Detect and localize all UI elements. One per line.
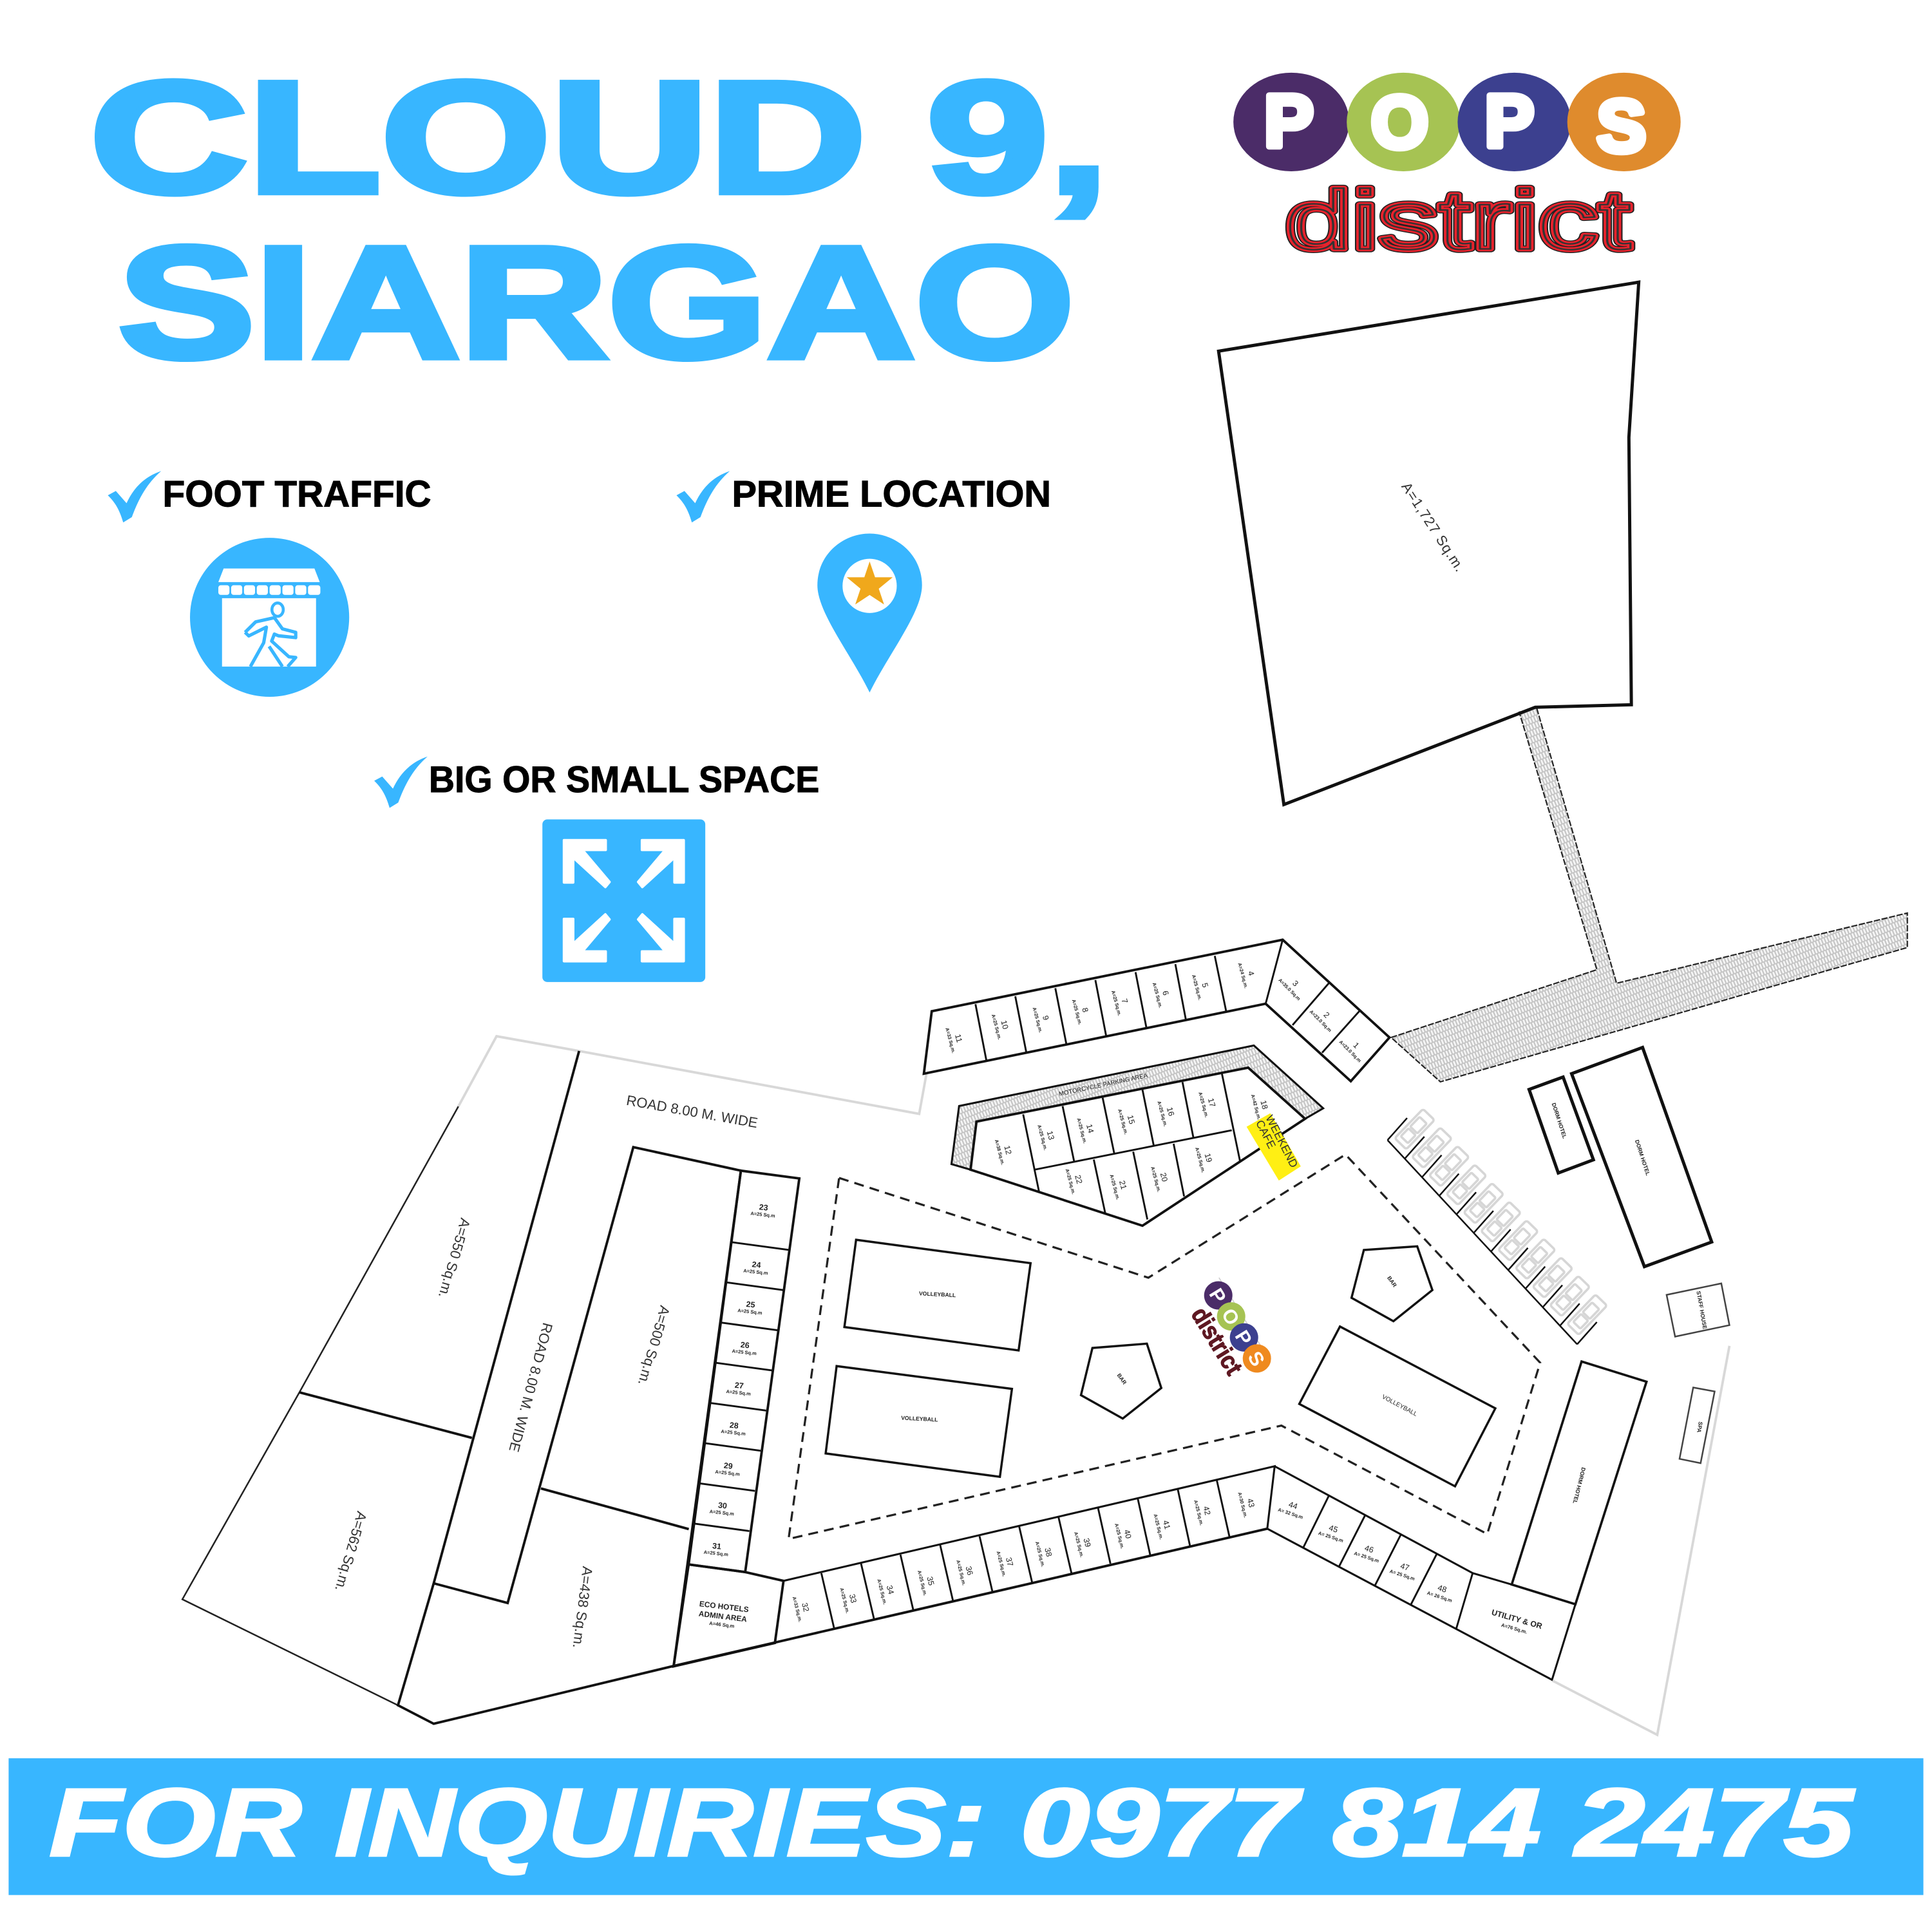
shops row 32 to 43 xyxy=(775,1466,1274,1643)
shops row 1 to 11: A=25 Sq.m. xyxy=(1110,990,1122,1016)
shops column 23 to 31: 23 xyxy=(759,1202,768,1213)
pavilion: bar right xyxy=(1352,1246,1432,1321)
logo: pops district: district xyxy=(1285,173,1631,267)
building: small dorm: DORM HOTEL xyxy=(1551,1102,1568,1139)
east boundary line xyxy=(1553,1346,1729,1735)
shops row 44 to 48 and utility: 48 xyxy=(1437,1583,1448,1595)
shops row 12 to 22: 19 xyxy=(1203,1152,1214,1163)
icon: check mark xyxy=(374,757,428,808)
building: staff house xyxy=(1667,1283,1729,1337)
pavilion: bar left xyxy=(1081,1343,1161,1419)
shops row 1 to 11: 6 xyxy=(1160,990,1170,996)
shops row 12 to 22: A=25 Sq.m. xyxy=(1194,1147,1206,1173)
label: A=550: A=550 Sq.m. xyxy=(435,1217,473,1300)
building: staff house: STAFF HOUSE xyxy=(1695,1291,1709,1330)
shops row 12 to 22: A=38 Sq.m. xyxy=(994,1139,1006,1166)
shops row 1 to 11: 10 xyxy=(999,1019,1010,1030)
court: volleyball 2: VOLLEYBALL xyxy=(901,1415,938,1423)
shops row 12 to 22: 20 xyxy=(1159,1171,1170,1182)
shops row 32 to 43: A=25 Sq.m. xyxy=(838,1587,851,1614)
small rotated pops logo: S xyxy=(1244,1348,1269,1370)
shops row 12 to 22: A=25 Sq.m. xyxy=(1075,1117,1088,1144)
feature: big or small space xyxy=(374,757,819,982)
shops column 23 to 31: 27 xyxy=(734,1381,744,1390)
shops column 23 to 31: 25 xyxy=(746,1300,755,1309)
shops row 32 to 43: A=33 Sq.m. xyxy=(791,1596,803,1623)
shops row 12 to 22: A=25 Sq.m. xyxy=(1197,1092,1209,1118)
heading: prime location: PRIME LOCATION xyxy=(732,473,1051,515)
shops row 32 to 43: A=25 Sq.m. xyxy=(955,1559,967,1586)
logo: pops district: district xyxy=(1285,173,1631,267)
shops row 32 to 43: A=25 Sq.m. xyxy=(1153,1513,1164,1540)
shops row 44 to 48 and utility: 44 xyxy=(1287,1500,1299,1511)
shops row 44 to 48 and utility: A= 32 Sq.m xyxy=(1277,1507,1304,1520)
shops row 12 to 22: 15 xyxy=(1126,1114,1137,1125)
shops row 32 to 43: A=25 Sq.m. xyxy=(996,1551,1007,1577)
shops row 32 to 43: 38 xyxy=(1043,1547,1054,1558)
shops row 32 to 43: A=25 Sq.m. xyxy=(916,1569,928,1596)
label: A=500: A=500 Sq.m. xyxy=(635,1304,673,1387)
logo: pops district xyxy=(1233,73,1681,267)
logo: pops district: O xyxy=(1371,82,1428,164)
shops row 32 to 43: 34 xyxy=(885,1584,896,1595)
icon: check mark xyxy=(676,471,730,522)
court: volleyball 2 xyxy=(826,1366,1012,1477)
parcel: A=1,727 Sq.m.: A=1,727 Sq.m. xyxy=(1398,479,1468,575)
shops column 23 to 31 xyxy=(688,1171,799,1572)
tag: weekend cafe: CAFE xyxy=(1253,1118,1278,1151)
shops column 23 to 31: 31 xyxy=(712,1541,722,1551)
logo: pops district: district xyxy=(1285,173,1631,267)
tag: weekend cafe xyxy=(1247,1113,1301,1180)
shops row 1 to 11: A=23.0 Sq.m xyxy=(1338,1039,1363,1064)
shops row 32 to 43: 39 xyxy=(1081,1537,1092,1548)
shops row 32 to 43: 43 xyxy=(1245,1497,1256,1508)
shops row 1 to 11: A=33 Sq.m. xyxy=(944,1027,956,1054)
feature: prime location xyxy=(676,471,1051,692)
shops column 23 to 31: A=25 Sq.m xyxy=(737,1307,762,1316)
shops row 1 to 11: 11 xyxy=(953,1033,964,1043)
small rotated pops logo: P xyxy=(1205,1285,1230,1307)
pavilion: bar right: BAR xyxy=(1386,1274,1398,1289)
shops row 12 to 22: 16 xyxy=(1165,1106,1176,1117)
access road hatched xyxy=(1391,707,1908,1082)
title xyxy=(90,49,1109,392)
tag: weekend cafe: WEEKEND xyxy=(1263,1113,1301,1170)
icon: map pin with star xyxy=(817,533,922,692)
shops column 23 to 31: 26 xyxy=(740,1340,750,1350)
pavilion: bar left: BAR xyxy=(1116,1372,1128,1386)
shops row 1 to 11: A=25 Sq.m. xyxy=(1191,974,1203,1001)
shops row 32 to 43: A=25 Sq.m. xyxy=(1193,1499,1205,1526)
motorcycle parking strip xyxy=(951,1045,1323,1170)
shops row 44 to 48 and utility: 45 xyxy=(1328,1523,1339,1535)
logo: pops district: P xyxy=(1484,80,1534,163)
shops row 12 to 22: A=25 Sq.m. xyxy=(1150,1166,1162,1193)
small rotated pops logo xyxy=(1177,1275,1276,1391)
shops column 23 to 31: A=25 Sq.m xyxy=(709,1508,735,1517)
shops row 32 to 43: 40 xyxy=(1122,1529,1133,1540)
shops row 1 to 11: 1 xyxy=(1351,1041,1361,1050)
building: spa xyxy=(1680,1388,1714,1463)
shops row 1 to 11: 3 xyxy=(1291,979,1300,989)
shops row 44 to 48 and utility xyxy=(1267,1466,1575,1680)
shops column 23 to 31: A=25 Sq.m xyxy=(743,1268,768,1276)
shops row 32 to 43: 33 xyxy=(848,1593,858,1604)
parcel: A=1,727 Sq.m. xyxy=(1218,282,1639,804)
building: dorm hotel xyxy=(1511,1361,1647,1604)
heading: foot traffic: FOOT TRAFFIC xyxy=(163,473,431,515)
shops row 32 to 43: A=25 Sq.m. xyxy=(1073,1531,1085,1558)
shops row 1 to 11: 5 xyxy=(1200,982,1210,989)
label: A=438: A=438 Sq.m. xyxy=(570,1566,596,1649)
shops row 12 to 22: A=25 Sq.m. xyxy=(1108,1174,1121,1200)
shops row 12 to 22: A=25 Sq.m. xyxy=(1117,1108,1129,1135)
footer banner: 0977 814 2475 xyxy=(1020,1768,1855,1876)
title: CLOUD 9, xyxy=(90,49,1109,226)
shops row 12 to 22 xyxy=(971,1068,1305,1226)
shops row 1 to 11: A=25 Sq.m. xyxy=(1032,1007,1044,1034)
building: large dorm: DORM HOTEL xyxy=(1634,1139,1651,1177)
shops row 32 to 43: A=25 Sq.m. xyxy=(1113,1523,1126,1549)
motorcycle parking strip: MOTORCYCLE PARKING AREA xyxy=(1058,1072,1149,1098)
court: volleyball 1: VOLLEYBALL xyxy=(919,1290,956,1298)
building: large dorm xyxy=(1571,1047,1712,1267)
shops row 44 to 48 and utility: A= 25 Sq.m xyxy=(1389,1568,1416,1582)
court: volleyball 1 xyxy=(844,1240,1030,1350)
shops row 1 to 11: 4 xyxy=(1246,970,1256,977)
shops column 23 to 31: 30 xyxy=(717,1501,728,1511)
shops row 44 to 48 and utility: 47 xyxy=(1399,1561,1410,1573)
shops column 23 to 31: 28 xyxy=(729,1421,739,1430)
shops row 1 to 11: A=25 Sq.m. xyxy=(1071,999,1083,1025)
icon: store with walking person xyxy=(190,538,349,697)
icon: expand arrows xyxy=(542,819,705,982)
label: road horizontal: ROAD 8.00 M. WIDE xyxy=(625,1092,759,1131)
shops row 1 to 11: 9 xyxy=(1041,1014,1050,1021)
shops row 1 to 11: A=35.0 Sq.m xyxy=(1277,977,1302,1002)
court: volleyball 3: VOLLEYBALL xyxy=(1381,1394,1418,1418)
building: spa: SPA xyxy=(1696,1421,1704,1433)
court: volleyball 3 xyxy=(1300,1327,1495,1486)
shops row 1 to 11: A=24 Sq.m. xyxy=(1236,962,1249,989)
footer banner xyxy=(8,1758,1924,1895)
shops row 44 to 48 and utility: 46 xyxy=(1363,1544,1375,1555)
eco hotels admin area: ADMIN AREA xyxy=(698,1609,748,1624)
shops row 44 to 48 and utility: A=76 Sq.m. xyxy=(1501,1622,1528,1635)
shops row 44 to 48 and utility: UTILITY & OR xyxy=(1490,1608,1543,1631)
logo: pops district: P xyxy=(1264,80,1314,163)
title: SIARGAO xyxy=(118,214,1074,392)
logo: pops district: S xyxy=(1597,85,1646,167)
shops row 12 to 22: 18 xyxy=(1258,1099,1269,1110)
shops row 12 to 22: A=25 Sq.m. xyxy=(1065,1168,1077,1195)
shops row 12 to 22: 17 xyxy=(1206,1097,1217,1108)
label: A=562: A=562 Sq.m. xyxy=(332,1510,370,1593)
plaza dashed outline xyxy=(788,1155,1540,1539)
eco hotels admin area: A=46 Sq.m xyxy=(709,1620,735,1629)
small rotated pops logo: P xyxy=(1231,1327,1256,1349)
shops column 23 to 31: A=25 Sq.m xyxy=(721,1428,746,1437)
building: dorm hotel: DORM HOTEL xyxy=(1571,1467,1587,1504)
parcels: left land lots xyxy=(182,1051,1267,1724)
shops row 44 to 48 and utility: A= 26 Sq.m xyxy=(1426,1590,1453,1604)
shops row 12 to 22: A=25 Sq.m. xyxy=(1156,1101,1168,1127)
shops row 32 to 43: 32 xyxy=(800,1602,811,1613)
shops row 12 to 22: 13 xyxy=(1045,1130,1056,1141)
eco hotels admin area xyxy=(674,1564,784,1667)
shops row 1 to 11: A=25 Sq.m. xyxy=(990,1014,1003,1040)
shops column 23 to 31: A=25 Sq.m xyxy=(703,1549,729,1558)
shops row 32 to 43: 35 xyxy=(925,1576,936,1587)
shops row 12 to 22: 12 xyxy=(1002,1144,1013,1155)
shops row 12 to 22: 22 xyxy=(1073,1174,1084,1185)
footer banner: FOR INQUIRIES: xyxy=(50,1768,986,1876)
shops row 32 to 43: 37 xyxy=(1004,1557,1015,1567)
icon: check mark xyxy=(108,471,161,522)
shops row 12 to 22: A=25 Sq.m. xyxy=(1036,1124,1048,1151)
shops column 23 to 31: 29 xyxy=(723,1461,733,1471)
shops row 1 to 11: 7 xyxy=(1119,998,1130,1005)
shops row 12 to 22: 21 xyxy=(1117,1179,1128,1191)
shops row 32 to 43: 41 xyxy=(1161,1519,1172,1530)
shops row 32 to 43: 36 xyxy=(964,1566,975,1576)
parking bay xyxy=(1388,1109,1607,1344)
shops row 1 to 11: A=25 Sq.m. xyxy=(1151,982,1164,1009)
building: small dorm xyxy=(1529,1077,1593,1173)
shops row 1 to 11: A=23.0 Sq.m xyxy=(1309,1009,1333,1034)
shops row 1 to 11: 8 xyxy=(1080,1007,1090,1014)
feature: foot traffic xyxy=(108,471,431,697)
shops row 1 to 11 xyxy=(924,940,1390,1081)
shops row 44 to 48 and utility: A= 25 Sq.m xyxy=(1318,1530,1344,1544)
shops row 32 to 43: 42 xyxy=(1201,1505,1212,1516)
shops row 44 to 48 and utility: A= 25 Sq.m xyxy=(1353,1550,1380,1564)
shops column 23 to 31: 24 xyxy=(752,1260,761,1270)
shops row 32 to 43: A=30 Sq.m. xyxy=(1236,1492,1249,1519)
shops row 12 to 22: 14 xyxy=(1084,1123,1095,1134)
shops row 32 to 43: A=25 Sq.m. xyxy=(876,1578,888,1605)
shops column 23 to 31: A=25 Sq.m xyxy=(750,1211,775,1219)
eco hotels admin area: ECO HOTELS xyxy=(699,1599,749,1614)
shops column 23 to 31: A=25 Sq.m xyxy=(726,1388,752,1397)
label: road vertical: ROAD 8.00 M. WIDE xyxy=(506,1321,556,1454)
shops row 32 to 43: A=25 Sq.m. xyxy=(1034,1541,1046,1567)
shops row 1 to 11: 2 xyxy=(1321,1010,1331,1020)
shops column 23 to 31: A=25 Sq.m xyxy=(732,1348,757,1356)
site boundary lines xyxy=(459,1036,927,1114)
heading: big or small space: BIG OR SMALL SPACE xyxy=(429,759,819,800)
small rotated pops logo: district xyxy=(1186,1302,1248,1380)
small rotated pops logo: O xyxy=(1217,1305,1244,1329)
shops row 12 to 22: A=42 Sq.m. xyxy=(1250,1094,1262,1121)
shops column 23 to 31: A=25 Sq.m xyxy=(715,1469,741,1477)
